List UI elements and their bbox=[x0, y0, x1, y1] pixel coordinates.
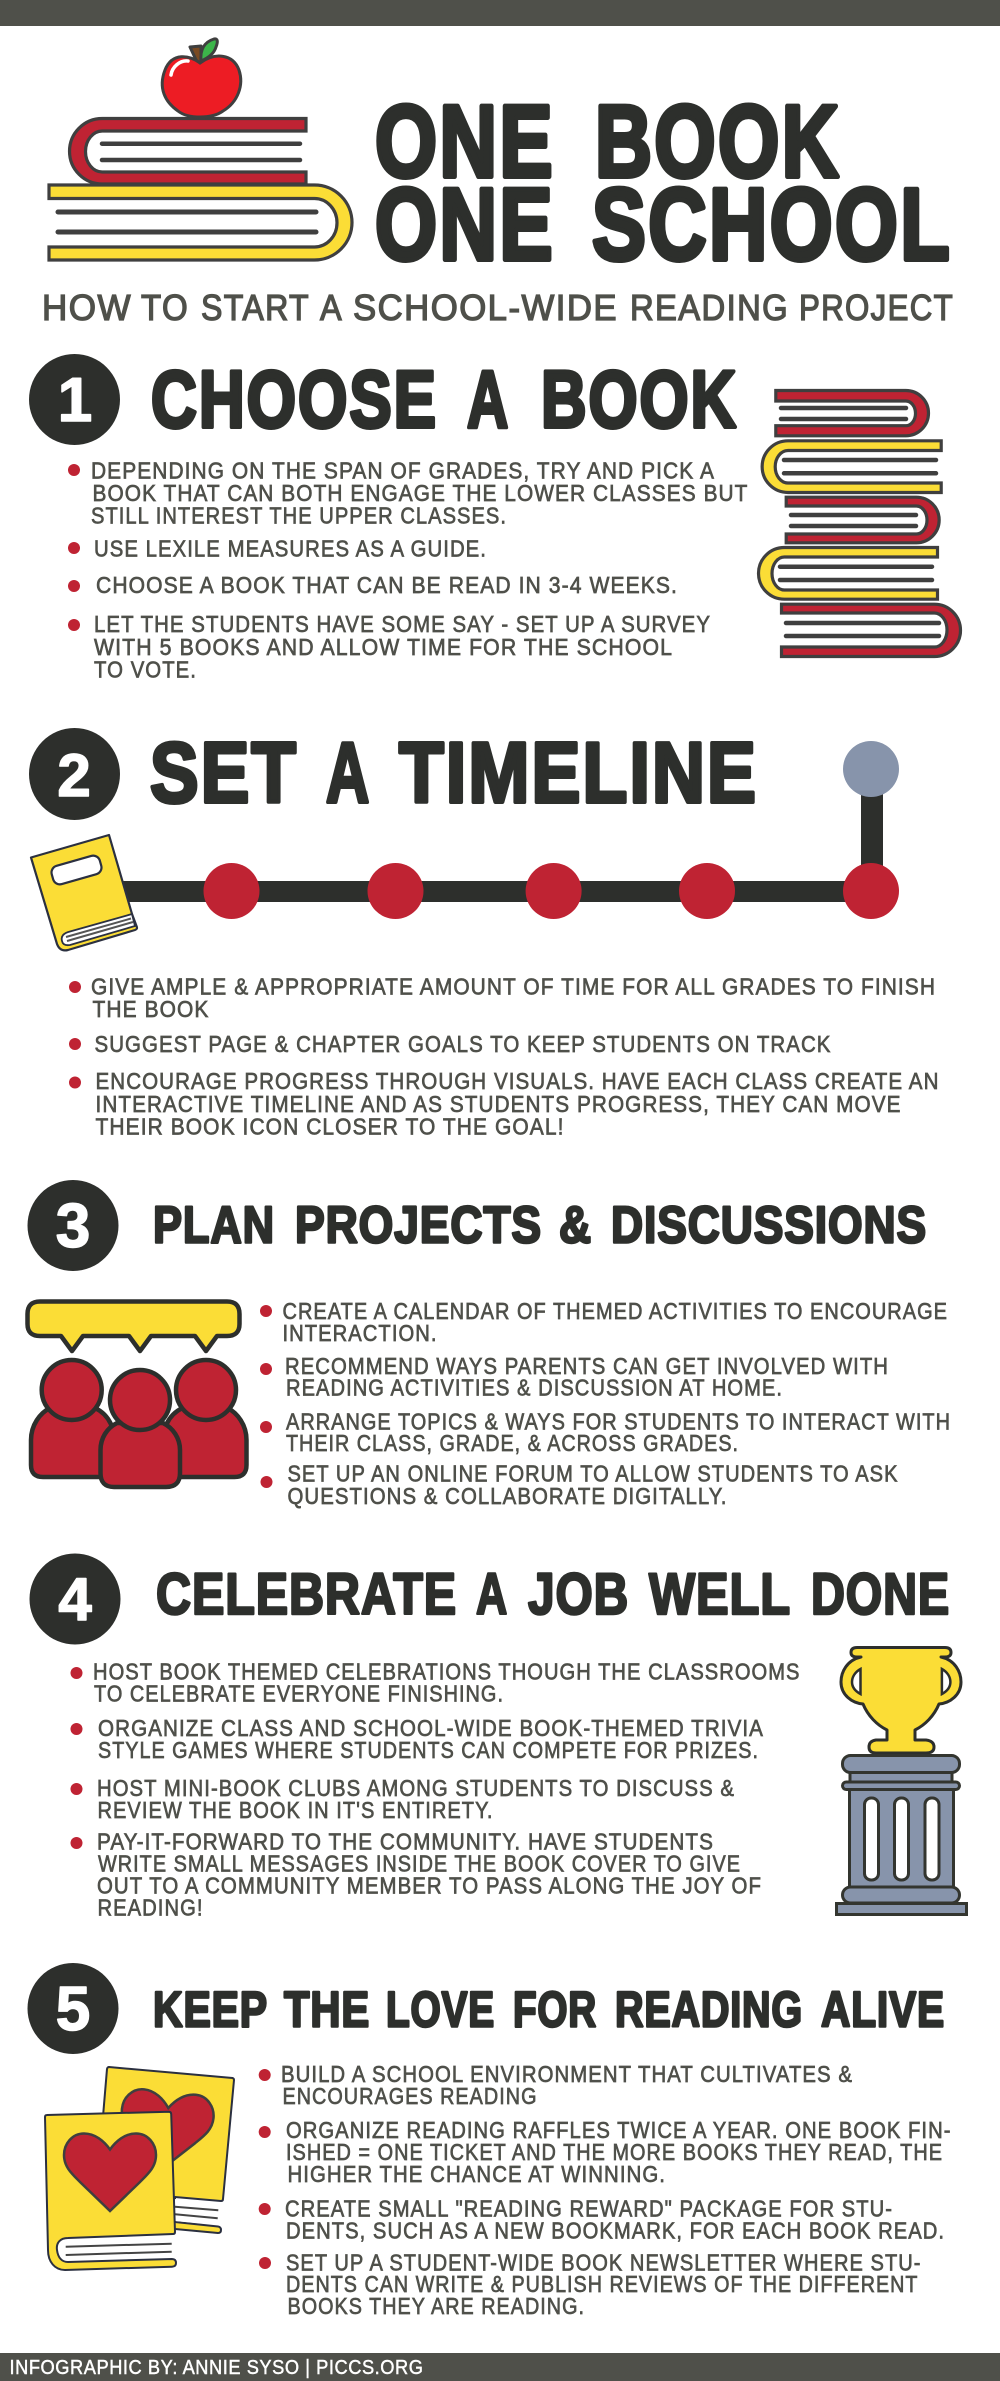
subtitle: A bbox=[320, 287, 343, 328]
bullet: THEIR CLASS, GRADE, & ACROSS GRADES. bbox=[286, 1430, 739, 1456]
bullet: STYLE GAMES WHERE STUDENTS CAN COMPETE FOR PRIZES. bbox=[98, 1737, 759, 1763]
bullet: READING ACTIVITIES & DISCUSSION AT HOME. bbox=[286, 1374, 783, 1400]
bullet: HOST BOOK THEMED CELEBRATIONS THOUGH THE CLASSROOMS bbox=[93, 1658, 800, 1684]
footer bar with credit bbox=[0, 2353, 1000, 2381]
bullet bbox=[259, 2061, 853, 2109]
number badge 3 bbox=[28, 1180, 118, 1271]
bullet bbox=[260, 1298, 948, 1346]
bullet: STILL INTEREST THE UPPER CLASSES. bbox=[91, 502, 507, 528]
bullet: WRITE SMALL MESSAGES INSIDE THE BOOK COVER TO GIVE bbox=[98, 1850, 741, 1876]
subtitle: TO bbox=[141, 287, 189, 328]
heading: BOOK bbox=[541, 355, 738, 445]
bullet: SET UP AN ONLINE FORUM TO ALLOW STUDENTS TO ASK bbox=[288, 1460, 898, 1486]
title: ONE bbox=[375, 84, 555, 198]
heading: PLAN bbox=[153, 1196, 275, 1254]
heading: PROJECTS bbox=[295, 1196, 542, 1254]
bullet bbox=[70, 1658, 800, 1706]
bullet: THE BOOK bbox=[92, 996, 210, 1022]
bullet: REVIEW THE BOOK IN IT'S ENTIRETY. bbox=[98, 1797, 494, 1823]
number badge 5: 5 bbox=[56, 1975, 90, 2044]
bullet bbox=[70, 1828, 762, 1920]
subtitle: SCHOOL-WIDE bbox=[353, 287, 618, 328]
heading bbox=[151, 355, 738, 445]
bullet bbox=[259, 2196, 945, 2244]
bullet: THEIR BOOK ICON CLOSER TO THE GOAL! bbox=[96, 1114, 564, 1140]
bullet: QUESTIONS & COLLABORATE DIGITALLY. bbox=[288, 1483, 728, 1509]
bullet: ORGANIZE CLASS AND SCHOOL-WIDE BOOK-THEMED TRIVIA bbox=[98, 1715, 764, 1741]
bullet: CHOOSE A BOOK THAT CAN BE READ IN 3-4 WEEKS. bbox=[96, 572, 678, 598]
heading: A bbox=[326, 726, 371, 821]
bullet: BOOKS THEY ARE READING. bbox=[288, 2293, 585, 2319]
number badge 4: 4 bbox=[58, 1566, 92, 1633]
number badge 3: 3 bbox=[56, 1192, 90, 1261]
heading: A bbox=[467, 355, 510, 445]
bullet: USE LEXILE MEASURES AS A GUIDE. bbox=[94, 536, 487, 562]
panel: step 2 set a timeline bbox=[29, 726, 940, 1140]
heading: READING bbox=[615, 1982, 803, 2038]
bullet bbox=[68, 458, 748, 528]
heading: WELL bbox=[649, 1562, 791, 1627]
bullet: INTERACTION. bbox=[282, 1320, 438, 1346]
panel: header bbox=[42, 39, 954, 328]
bullet bbox=[260, 1353, 889, 1400]
heading bbox=[156, 1562, 950, 1627]
bullet: TO VOTE. bbox=[94, 656, 197, 682]
bullet: LET THE STUDENTS HAVE SOME SAY - SET UP A SURVEY bbox=[94, 611, 711, 637]
bullet: BOOK THAT CAN BOTH ENGAGE THE LOWER CLASSES BUT bbox=[92, 480, 748, 506]
bullet: CREATE SMALL "READING REWARD" PACKAGE FOR STU- bbox=[285, 2196, 893, 2222]
number badge 1: 1 bbox=[58, 366, 92, 435]
panel: step 3 plan projects and discussions bbox=[28, 1180, 951, 1509]
heading: A bbox=[476, 1562, 508, 1627]
bullet: READING! bbox=[98, 1894, 204, 1920]
heading: ALIVE bbox=[821, 1982, 945, 2038]
number badge 2: 2 bbox=[57, 742, 91, 809]
icon: apple on stacked books bbox=[49, 39, 352, 260]
icon: trophy on pedestal bbox=[836, 1648, 966, 1914]
bullet: TO CELEBRATE EVERYONE FINISHING. bbox=[94, 1680, 504, 1706]
bullet bbox=[69, 974, 936, 1022]
heading bbox=[150, 726, 758, 821]
subtitle: PROJECT bbox=[799, 287, 954, 328]
bullet bbox=[259, 2250, 922, 2319]
heading: DONE bbox=[811, 1562, 950, 1627]
subtitle: START bbox=[201, 287, 310, 328]
heading bbox=[153, 1982, 945, 2038]
heading bbox=[153, 1196, 927, 1254]
chart: timeline track with milestones bbox=[121, 741, 899, 919]
bullet bbox=[259, 2117, 952, 2187]
bullet: HOST MINI-BOOK CLUBS AMONG STUDENTS TO DISCUSS & bbox=[97, 1775, 735, 1801]
heading: DISCUSSIONS bbox=[611, 1196, 927, 1254]
bullet bbox=[70, 1775, 735, 1823]
icon: yellow book on timeline bbox=[31, 835, 137, 950]
number badge 4 bbox=[30, 1554, 120, 1644]
heading: TIMELINE bbox=[399, 726, 758, 821]
heading: THE bbox=[284, 1982, 370, 2038]
title bbox=[375, 84, 952, 282]
title: ONE bbox=[375, 168, 555, 282]
bullet bbox=[260, 1460, 898, 1509]
bullet: ENCOURAGES READING bbox=[282, 2083, 538, 2109]
bullet: WITH 5 BOOKS AND ALLOW TIME FOR THE SCHOOL bbox=[94, 634, 673, 660]
bullet: HIGHER THE CHANCE AT WINNING. bbox=[288, 2161, 666, 2187]
heading: CELEBRATE bbox=[156, 1562, 457, 1627]
icon: two books with hearts bbox=[45, 2067, 234, 2270]
footer bar with credit: INFOGRAPHIC BY: ANNIE SYSO | PICCS.ORG bbox=[10, 2357, 424, 2379]
number badge 1 bbox=[29, 354, 120, 445]
bullet: RECOMMEND WAYS PARENTS CAN GET INVOLVED WITH bbox=[285, 1353, 889, 1379]
heading: LOVE bbox=[386, 1982, 495, 2038]
icon: stack of five books bbox=[758, 390, 960, 656]
bullet: BUILD A SCHOOL ENVIRONMENT THAT CULTIVATES & bbox=[281, 2061, 853, 2087]
panel: step 5 keep the love for reading alive bbox=[28, 1963, 952, 2319]
bullet bbox=[260, 1408, 951, 1456]
heading: & bbox=[559, 1196, 592, 1254]
bullet: OUT TO A COMMUNITY MEMBER TO PASS ALONG THE JOY OF bbox=[97, 1872, 762, 1898]
subtitle bbox=[42, 287, 954, 328]
bullet: INTERACTIVE TIMELINE AND AS STUDENTS PROGRESS, THEY CAN MOVE bbox=[96, 1091, 902, 1117]
heading: JOB bbox=[528, 1562, 629, 1627]
icon: group of students with speech bubble bbox=[28, 1302, 246, 1487]
top bar bbox=[0, 0, 1000, 26]
heading: FOR bbox=[513, 1982, 597, 2038]
subtitle: HOW bbox=[42, 287, 132, 328]
heading: KEEP bbox=[153, 1982, 268, 2038]
number badge 5 bbox=[28, 1963, 118, 2054]
heading: CHOOSE bbox=[151, 355, 438, 445]
number badge 2 bbox=[29, 728, 120, 820]
bullet: SUGGEST PAGE & CHAPTER GOALS TO KEEP STUDENTS ON TRACK bbox=[94, 1031, 832, 1057]
title: BOOK bbox=[595, 84, 841, 198]
subtitle: READING bbox=[630, 287, 789, 328]
panel: step 1 choose a book bbox=[29, 354, 960, 682]
heading: SET bbox=[150, 726, 298, 821]
bullet bbox=[70, 1715, 764, 1763]
panel: step 4 celebrate a job well done bbox=[30, 1554, 966, 1920]
bullet bbox=[68, 611, 711, 682]
bullet: PAY-IT-FORWARD TO THE COMMUNITY. HAVE STUDENTS bbox=[97, 1828, 714, 1854]
bullet bbox=[69, 1068, 940, 1140]
bullet: DEPENDING ON THE SPAN OF GRADES, TRY AND PICK A bbox=[91, 458, 715, 484]
